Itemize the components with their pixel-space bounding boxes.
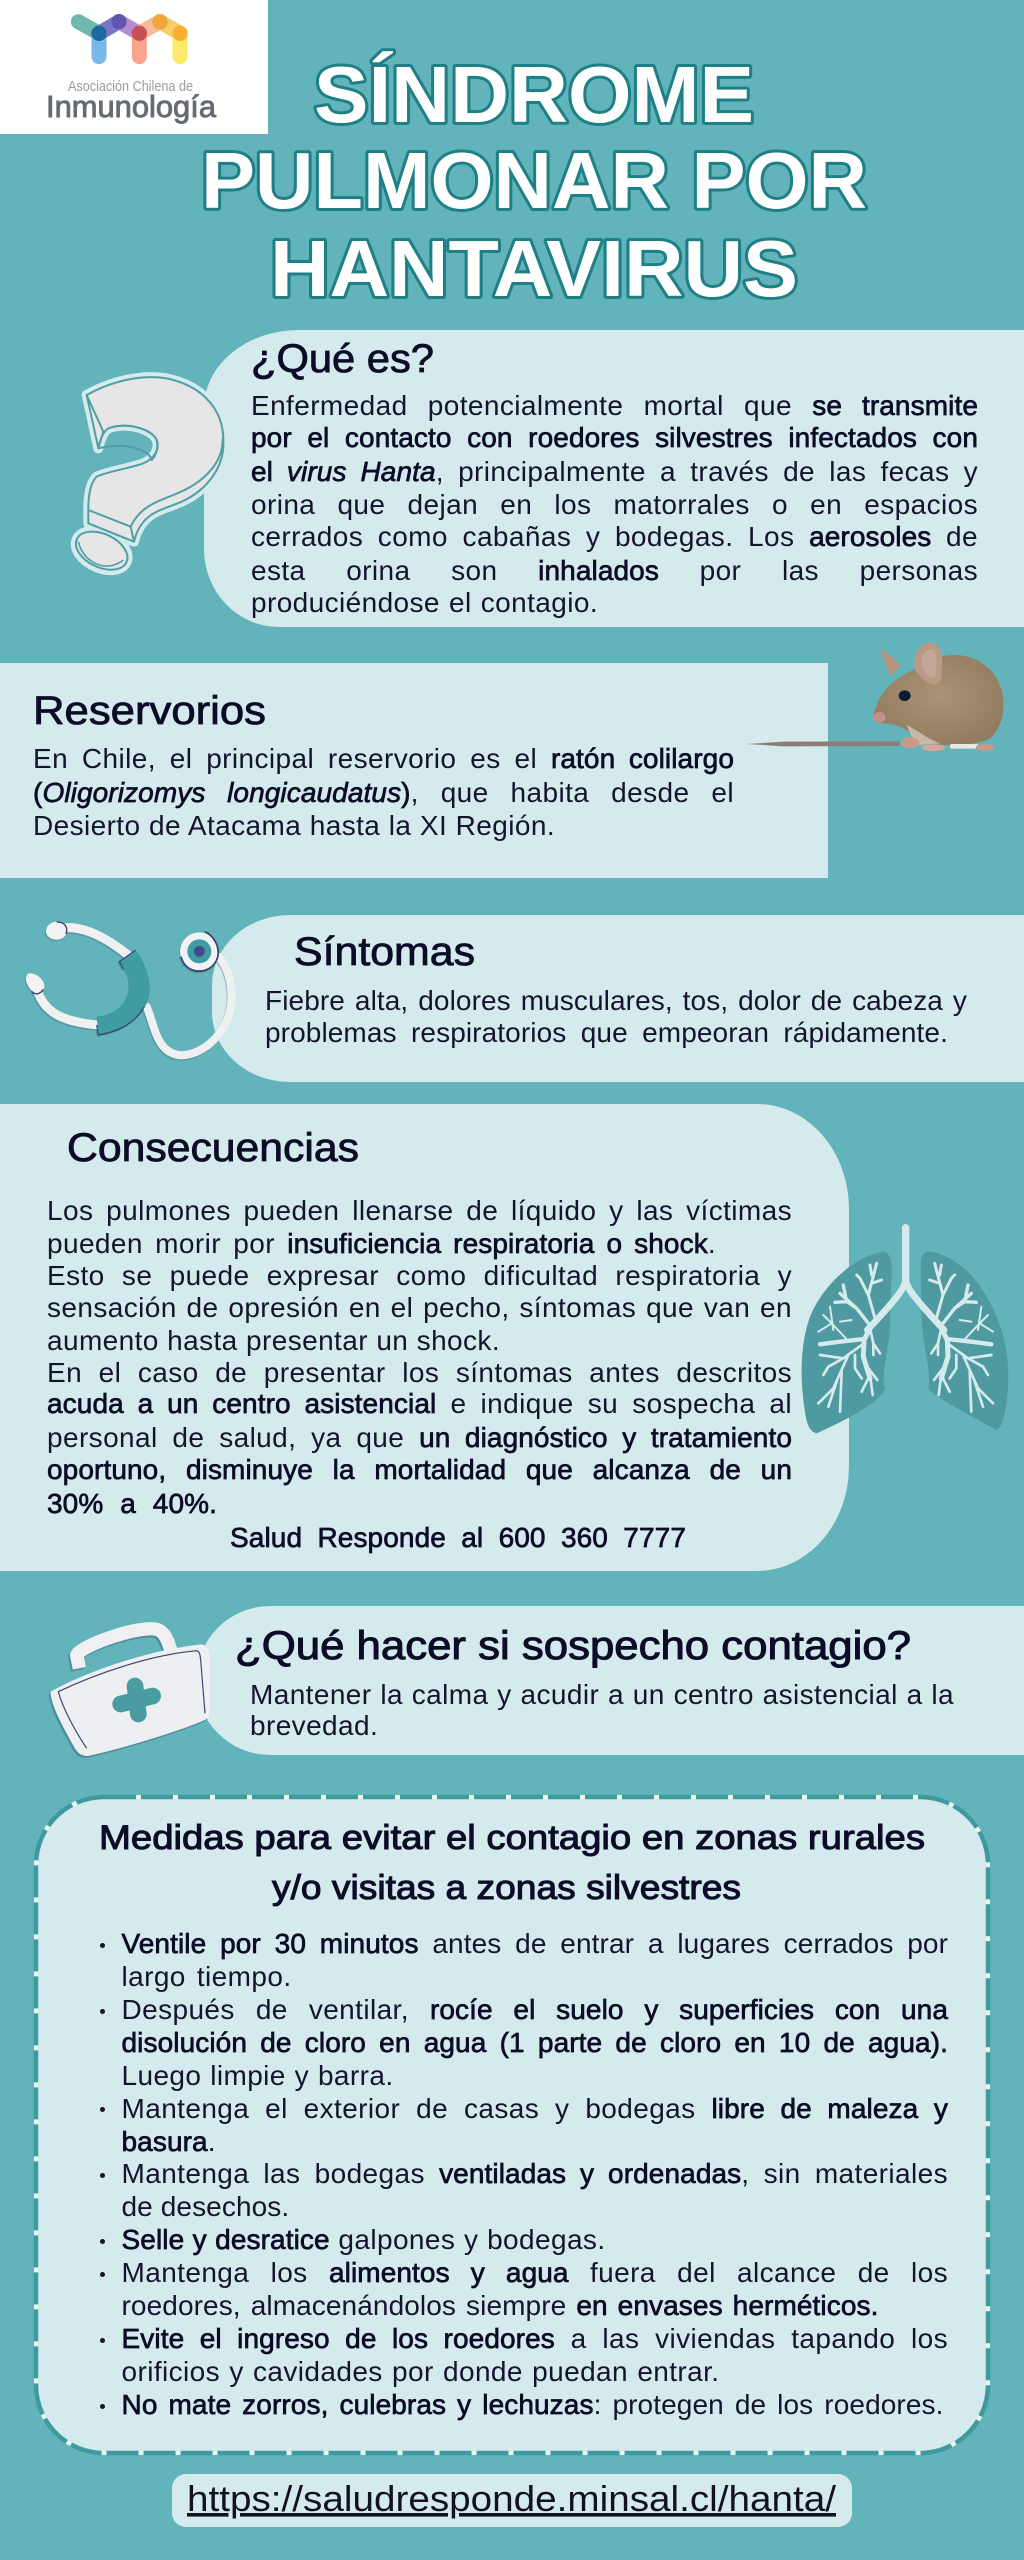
text: consecuencias: oportuno, disminuye la mortalidad que alcanza de un <box>47 1454 792 1485</box>
title: PULMONAR POR <box>201 136 867 225</box>
list: medidas: Luego limpie y barra. <box>122 2060 394 2091</box>
text: consecuencias <box>47 1195 792 1519</box>
text: que es: el virus Hanta, principalmente a través de las fecas y <box>251 456 978 487</box>
list: medidas: Después de ventilar, rocíe el suelo y superficies con una <box>122 1994 948 2025</box>
heading: medidas: Medidas para evitar el contagio en zonas rurales <box>99 1819 925 1857</box>
logo icon <box>70 14 188 64</box>
list: medidas: Mantenga el exterior de casas y bodegas libre de maleza y <box>122 2092 948 2124</box>
heading: que es: ¿Qué es? <box>251 337 434 381</box>
panel: que es <box>204 330 1024 627</box>
list: medidas <box>100 1928 948 2420</box>
heading: sintomas: Síntomas <box>294 930 475 974</box>
icon: lungs <box>802 1224 1008 1434</box>
heading: que hacer: ¿Qué hacer si sospecho contagio? <box>235 1624 911 1668</box>
text: sintomas <box>265 985 967 1048</box>
list: medidas: No mate zorros, culebras y lechuzas: protegen de los roedores. <box>122 2389 944 2420</box>
heading: consecuencias: Consecuencias <box>67 1126 359 1170</box>
logo text: Asociación Chilena de <box>68 79 193 95</box>
heading: medidas: y/o visitas a zonas silvestres <box>272 1869 741 1907</box>
url pill <box>172 2474 852 2527</box>
text: que es: esta orina son inhalados por las personas <box>251 555 978 586</box>
text: que es <box>251 390 978 618</box>
icon: first aid kit <box>48 1622 210 1758</box>
icon: mouse <box>748 642 1004 751</box>
halo <box>70 377 223 578</box>
title <box>201 48 868 313</box>
icon: stethoscope <box>25 921 236 1061</box>
panel: que hacer <box>196 1606 1024 1755</box>
list: medidas: de desechos. <box>122 2191 289 2222</box>
text: que es: produciéndose el contagio. <box>251 587 598 618</box>
text: consecuencias: Esto se puede expresar como dificultad respiratoria y <box>47 1260 792 1291</box>
panel: reservorios <box>0 663 828 878</box>
heading: medidas <box>99 1819 925 1907</box>
text: consecuencias: acuda a un centro asistencial e indique su sospecha al <box>47 1388 792 1419</box>
list: medidas: basura. <box>122 2126 216 2157</box>
list: medidas: Mantenga las bodegas ventiladas y ordenadas, sin materiales <box>122 2158 948 2189</box>
text: que hacer: Mantener la calma y acudir a un centro asistencial a la <box>250 1679 954 1710</box>
text: que es: orina que dejan en los matorrales o en espacios <box>251 489 978 520</box>
list: medidas: Ventile por 30 minutos antes de entrar a lugares cerrados por <box>122 1928 948 1959</box>
text: consecuencias: pueden morir por insuficiencia respiratoria o shock. <box>47 1228 716 1259</box>
text: reservorios: En Chile, el principal reservorio es el ratón colilargo <box>33 743 734 774</box>
text: que es: Enfermedad potencialmente mortal que se transmite <box>251 390 978 421</box>
list: medidas: disolución de cloro en agua (1 parte de cloro en 10 de agua). <box>122 2027 948 2058</box>
text: consecuencias: Los pulmones pueden llenarse de líquido y las víctimas <box>47 1195 792 1226</box>
title: HANTAVIRUS <box>270 224 798 313</box>
logo panel <box>0 0 268 134</box>
text: sintomas: problemas respiratorios que empeoran rápidamente. <box>265 1017 948 1048</box>
text: sintomas: Fiebre alta, dolores musculares, tos, dolor de cabeza y <box>265 985 967 1016</box>
list: medidas: Selle y desratice galpones y bodegas. <box>122 2224 606 2255</box>
title: SÍNDROME <box>314 50 754 139</box>
text: consecuencias: En el caso de presentar los síntomas antes descritos <box>47 1357 792 1388</box>
heading: reservorios: Reservorios <box>33 689 266 733</box>
list: medidas: Mantenga los alimentos y agua fuera del alcance de los <box>122 2257 948 2288</box>
face <box>87 377 223 542</box>
text: salud responde: Salud Responde al 600 360 7777 <box>230 1522 686 1553</box>
dot <box>70 524 133 577</box>
text: reservorios <box>33 743 734 841</box>
text: reservorios: Desierto de Atacama hasta la XI Región. <box>33 810 555 841</box>
text: consecuencias: aumento hasta presentar un shock. <box>47 1325 500 1356</box>
list: medidas: roedores, almacenándolos siempre en envases herméticos. <box>122 2290 878 2321</box>
list: medidas: orificios y cavidades por donde puedan entrar. <box>122 2356 720 2387</box>
text: que hacer <box>250 1679 954 1741</box>
text: que es: cerrados como cabañas y bodegas. Los aerosoles de <box>251 521 978 552</box>
logo text: Inmunología <box>46 89 217 124</box>
text: consecuencias: personal de salud, ya que un diagnóstico y tratamiento <box>47 1422 792 1453</box>
text: reservorios: (Oligorizomys longicaudatus), que habita desde el <box>33 777 734 808</box>
panel: medidas <box>34 1794 990 2456</box>
list: medidas: Evite el ingreso de los roedores a las viviendas tapando los <box>122 2323 948 2354</box>
text: consecuencias: 30% a 40%. <box>47 1488 217 1519</box>
panel: consecuencias <box>0 1104 849 1571</box>
url text: https://saludresponde.minsal.cl/hanta/ <box>187 2478 836 2519</box>
panel: sintomas <box>212 915 1024 1082</box>
icon: question mark <box>70 372 224 576</box>
text: que hacer: brevedad. <box>250 1710 378 1741</box>
list: medidas: largo tiempo. <box>122 1961 292 1992</box>
text: consecuencias: sensación de opresión en el pecho, síntomas que van en <box>47 1292 792 1323</box>
text: que es: por el contacto con roedores silvestres infectados con <box>251 422 978 453</box>
